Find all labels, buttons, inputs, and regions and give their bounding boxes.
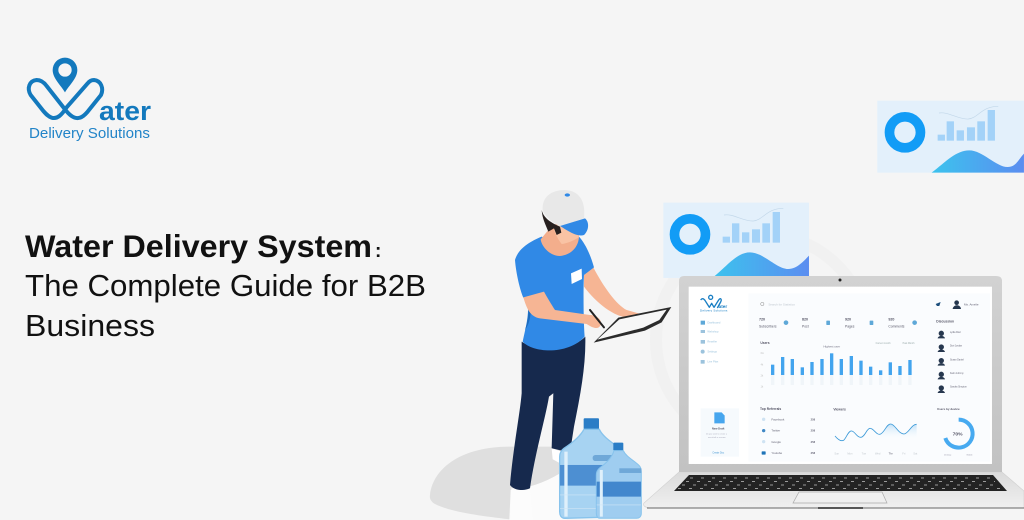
users bar chart: 2k: [761, 375, 764, 377]
discussion list: Discussion: [936, 319, 954, 323]
new draft card: [701, 408, 739, 457]
touchpad: [793, 492, 887, 503]
users bar chart: 4k: [761, 364, 764, 366]
users by device donut: [937, 407, 973, 456]
near arm: [523, 292, 601, 328]
users bar chart: Past Month: [903, 342, 915, 345]
user header: [936, 300, 979, 309]
title line 2: The Complete Guide for B2B: [25, 268, 426, 303]
far arm: [584, 267, 641, 319]
trousers: [510, 337, 585, 490]
delivery person: [510, 190, 671, 520]
stat tiles: Comments: [888, 325, 905, 329]
viewers line chart: Fri: [902, 451, 906, 455]
stat tiles: Pages: [845, 325, 855, 329]
title: [25, 228, 426, 343]
water bottles: [560, 418, 641, 518]
stat tiles: 920: [845, 318, 851, 322]
name badge: [571, 269, 582, 284]
viewers line chart: Wed: [875, 451, 881, 455]
top referrals: Top Referrals: [760, 407, 781, 411]
users bar chart: Highest user: [823, 345, 840, 349]
neck and face: [541, 223, 579, 256]
viewers line chart: Sun: [834, 451, 840, 455]
discussion list: [936, 319, 967, 393]
logo subtitle: Delivery Solutions: [29, 125, 150, 142]
viewers line chart: Tue: [862, 451, 867, 455]
title line 1: Water Delivery System: [25, 228, 372, 264]
hair: [542, 210, 561, 235]
dashboard logo: [700, 295, 728, 313]
faint circle behind laptop: [656, 234, 868, 446]
discussion list: Dori Jordan: [950, 345, 963, 348]
floating chart card: top right: [877, 101, 1024, 173]
ground shadow: [430, 447, 567, 520]
stat tiles: 820: [802, 318, 808, 322]
users bar chart: [760, 341, 915, 388]
stat tiles: Post: [802, 325, 809, 329]
title line 3: Business: [25, 308, 155, 343]
top referrals: 258: [811, 417, 816, 421]
stat tiles: 920: [888, 318, 894, 322]
sidebar menu: [701, 321, 721, 364]
viewers line chart: [833, 407, 918, 455]
camera: [838, 278, 842, 282]
laptop base: [644, 472, 1024, 508]
new draft card: New Draft: [712, 426, 725, 430]
t-shirt: [515, 237, 594, 350]
front shoe: [511, 488, 533, 520]
small bottle: [596, 443, 641, 518]
viewers line chart: Thr: [889, 451, 893, 455]
top referrals: [760, 407, 816, 455]
back leg shoe: [552, 448, 562, 463]
discussion list: Sandra Simpton: [950, 385, 967, 388]
sidebar menu: Live Plan: [707, 360, 719, 364]
discussion list: Lydia Diaz: [950, 332, 962, 334]
users bar chart: 1k: [761, 386, 764, 388]
new draft card: Create Doc: [712, 451, 725, 454]
viewers line chart: Mon: [847, 451, 853, 455]
top referrals: 258: [811, 440, 816, 444]
top referrals: Facebook: [771, 417, 785, 421]
users by device donut: Mobile: [967, 454, 973, 456]
logo: [29, 58, 152, 142]
new draft card: Do you want to create a: [706, 433, 728, 436]
search bar: Search for Statistics: [768, 302, 795, 306]
laptop: [644, 276, 1024, 508]
pen: [590, 310, 604, 327]
top referrals: 258: [811, 429, 816, 433]
top referrals: Google: [771, 440, 781, 444]
top referrals: Youtube: [771, 451, 783, 455]
viewers line chart: Viewers: [833, 407, 846, 411]
dashboard logo: ater: [719, 304, 727, 309]
keyboard: [674, 475, 1007, 491]
floating chart card: center: [663, 203, 809, 278]
large bottle: [560, 418, 623, 518]
top referrals: Twitter: [771, 429, 780, 433]
laptop lid: [679, 276, 1002, 472]
user header: Ms. Amelie: [964, 303, 979, 307]
new draft card: new draft or resume: [708, 436, 727, 439]
viewers line chart: Sat: [913, 451, 918, 455]
users by device donut: 70%: [953, 431, 963, 437]
logo word: ater: ater: [99, 96, 152, 126]
dashboard logo: Delivery Solutions: [700, 309, 728, 313]
cap: [543, 190, 588, 235]
screen dashboard: [689, 287, 992, 464]
users by device donut: Users by device: [937, 407, 960, 411]
sidebar menu: Dashboard: [707, 321, 721, 325]
discussion list: Karin Johnny: [950, 372, 964, 375]
sidebar menu: Reseller: [707, 340, 717, 344]
users bar chart: Current month: [876, 342, 891, 345]
top referrals: 258: [811, 451, 816, 455]
stat tiles: Subscribers: [759, 325, 777, 329]
stat tiles: 720: [759, 318, 765, 322]
sidebar menu: Webshop: [707, 330, 719, 334]
stat tiles: [759, 318, 917, 329]
clipboard: [594, 307, 671, 343]
title colon: :: [375, 241, 381, 262]
sidebar menu: Settings: [707, 350, 718, 354]
users bar chart: Users: [760, 341, 770, 345]
discussion list: Susan Daniel: [950, 359, 964, 361]
users by device donut: Desktop: [944, 453, 952, 456]
users bar chart: 6m: [761, 353, 764, 355]
logo mark: [29, 58, 102, 118]
